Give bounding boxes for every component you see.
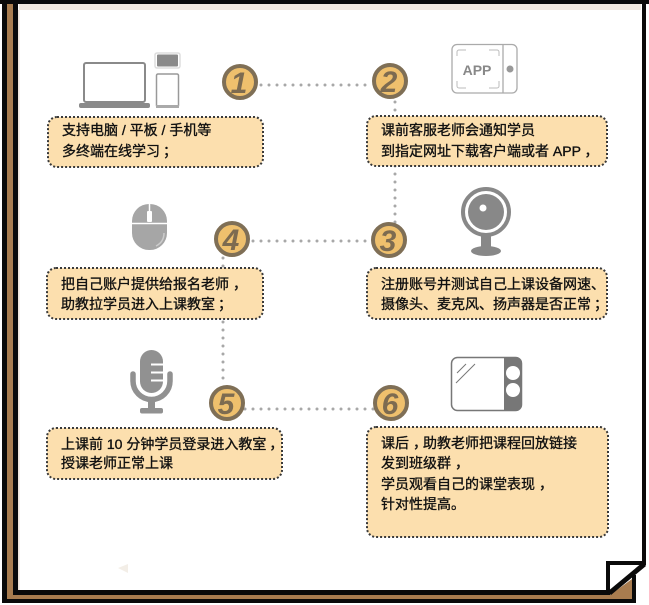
text box 4 bbox=[47, 268, 263, 319]
step 5 bbox=[47, 350, 283, 479]
text box 5 bbox=[47, 428, 283, 479]
number badge 5: 5 bbox=[218, 388, 236, 421]
number badge 1 bbox=[224, 66, 256, 100]
number badge 6 bbox=[375, 387, 407, 421]
text box 2: 到指定网址下载客户端或者 APP ， bbox=[381, 143, 599, 159]
step 4 bbox=[47, 204, 263, 319]
text box 3: 注册账号并测试自己上课设备网速、 bbox=[381, 276, 605, 292]
text box 5: 上课前 10 分钟学员登录进入教室， bbox=[61, 436, 283, 452]
step 3 bbox=[367, 189, 608, 319]
icon: laptop, tablet and phone bbox=[79, 53, 180, 108]
icon: app tablet: APP bbox=[463, 62, 491, 78]
number badge 1: 1 bbox=[231, 67, 247, 100]
text box 5: 授课老师正常上课 bbox=[61, 455, 173, 471]
icon: microphone bbox=[133, 350, 170, 414]
number badge 5 bbox=[211, 387, 243, 421]
number badge 4: 4 bbox=[222, 224, 240, 257]
number badge 3: 3 bbox=[380, 225, 397, 258]
icon: television bbox=[452, 357, 522, 411]
number badge 3 bbox=[373, 224, 405, 258]
text box 4: 把自己账户提供给报名老师 ， bbox=[61, 276, 247, 292]
text box 1: 多终端在线学习； bbox=[62, 143, 177, 160]
text box 4: 助教拉学员进入上课教室； bbox=[61, 296, 232, 313]
text box 1: 支持电脑 / 平板 / 手机等 bbox=[62, 122, 211, 138]
text box 6: 课后 ，助教老师把课程回放链接 bbox=[381, 435, 577, 451]
step 2 bbox=[367, 44, 607, 166]
icon: webcam bbox=[463, 189, 509, 256]
number badge 6: 6 bbox=[382, 388, 399, 421]
text box 1 bbox=[48, 117, 263, 167]
text box 6 bbox=[367, 427, 608, 537]
step 6 bbox=[367, 357, 608, 537]
text box 6: 发到班级群 ， bbox=[381, 455, 469, 471]
text box 2 bbox=[367, 116, 607, 166]
text box 3: 摄像头、麦克风、扬声器是否正常； bbox=[381, 296, 608, 313]
icon: mouse bbox=[132, 204, 167, 250]
icon: app tablet bbox=[452, 44, 517, 93]
dotted connector path bbox=[223, 85, 395, 409]
number badge 4 bbox=[216, 223, 248, 257]
text box 2: 课前客服老师会通知学员 bbox=[381, 122, 535, 138]
text box 3 bbox=[367, 268, 608, 319]
text box 6: 学员观看自己的课堂表现 ， bbox=[381, 476, 553, 492]
number badge 2: 2 bbox=[380, 66, 398, 99]
number badge 2 bbox=[374, 65, 406, 99]
text box 6: 针对性提高。 bbox=[381, 496, 465, 512]
step 1 bbox=[48, 53, 263, 167]
